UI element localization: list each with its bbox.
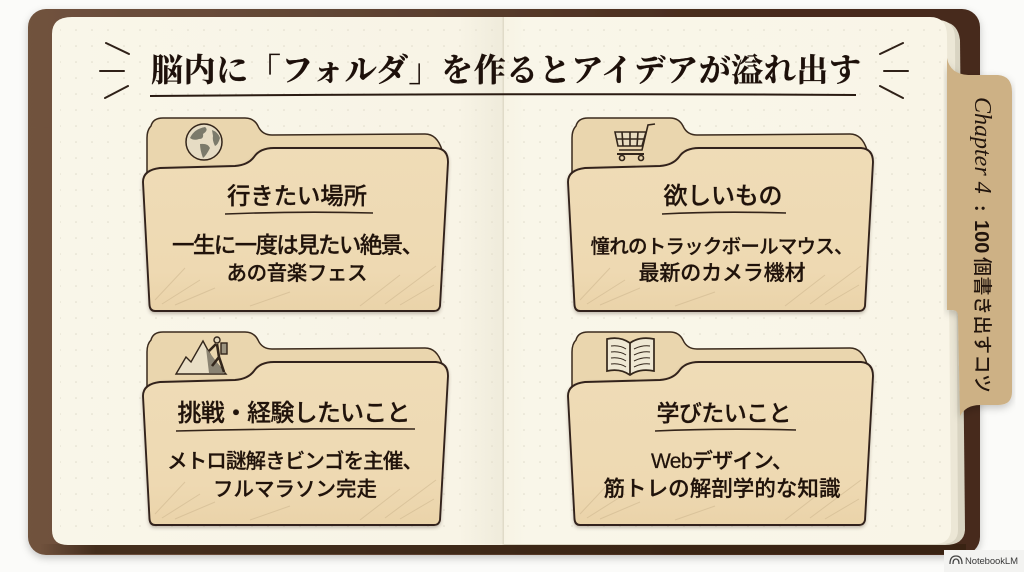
page stack right edge: [503, 20, 965, 545]
tab label: [969, 97, 995, 393]
heading: 行きたい場所: [227, 183, 367, 209]
icon: left accent rays: [100, 43, 129, 98]
tab label: 100: [970, 220, 992, 253]
heading underline: [655, 429, 796, 431]
title: 脳内に「フォルダ」を作るとアイデアが溢れ出す: [151, 52, 861, 88]
heading underline: [225, 212, 373, 214]
panel: 挑戦・経験したいこと: [143, 332, 448, 525]
heading underline: [662, 212, 786, 214]
description: [172, 233, 424, 285]
icon: mountain climber: [176, 337, 227, 374]
description: [167, 449, 423, 501]
heading underline: [176, 429, 415, 431]
description: フルマラソン完走: [213, 478, 377, 501]
description: メトロ謎解きビンゴを主催、: [167, 449, 423, 473]
description: [590, 236, 854, 285]
icon: open book: [607, 338, 654, 375]
heading: 挑戦・経験したいこと: [178, 400, 410, 427]
tab label: Chapter 4: [969, 97, 995, 194]
panel: 学びたいこと: [568, 332, 873, 525]
heading: 欲しいもの: [664, 183, 782, 210]
description: Webデザイン、: [651, 449, 793, 473]
description: 筋トレの解剖学的な知識: [604, 477, 841, 501]
tab label: :: [970, 205, 992, 212]
badge text: NotebookLM: [965, 556, 1018, 567]
title underline: [150, 94, 856, 96]
description: あの音楽フェス: [226, 262, 368, 285]
description: 一生に一度は見たい絶景、: [172, 233, 424, 258]
chapter tab: [947, 58, 1012, 416]
right page: [503, 17, 951, 544]
NotebookLM badge: [944, 550, 1024, 572]
icon: NotebookLM mark: [950, 556, 962, 564]
description: 憧れのトラックボールマウス、: [590, 236, 854, 258]
icon: globe: [186, 124, 222, 160]
tab label: 個書き出すコツ: [971, 257, 993, 393]
icon: shopping cart: [615, 124, 655, 160]
left page: [52, 17, 503, 545]
description: [604, 449, 841, 501]
panel: 行きたい場所: [143, 118, 448, 311]
panel: 欲しいもの: [568, 118, 873, 311]
heading: 学びたいこと: [656, 400, 792, 426]
bottom cover edge: [40, 544, 966, 554]
spine shadow: [502, 17, 504, 545]
dot grid: [60, 24, 944, 538]
description: 最新のカメラ機材: [638, 262, 806, 285]
tab shape: [947, 58, 1012, 416]
icon: right accent rays: [880, 43, 908, 98]
